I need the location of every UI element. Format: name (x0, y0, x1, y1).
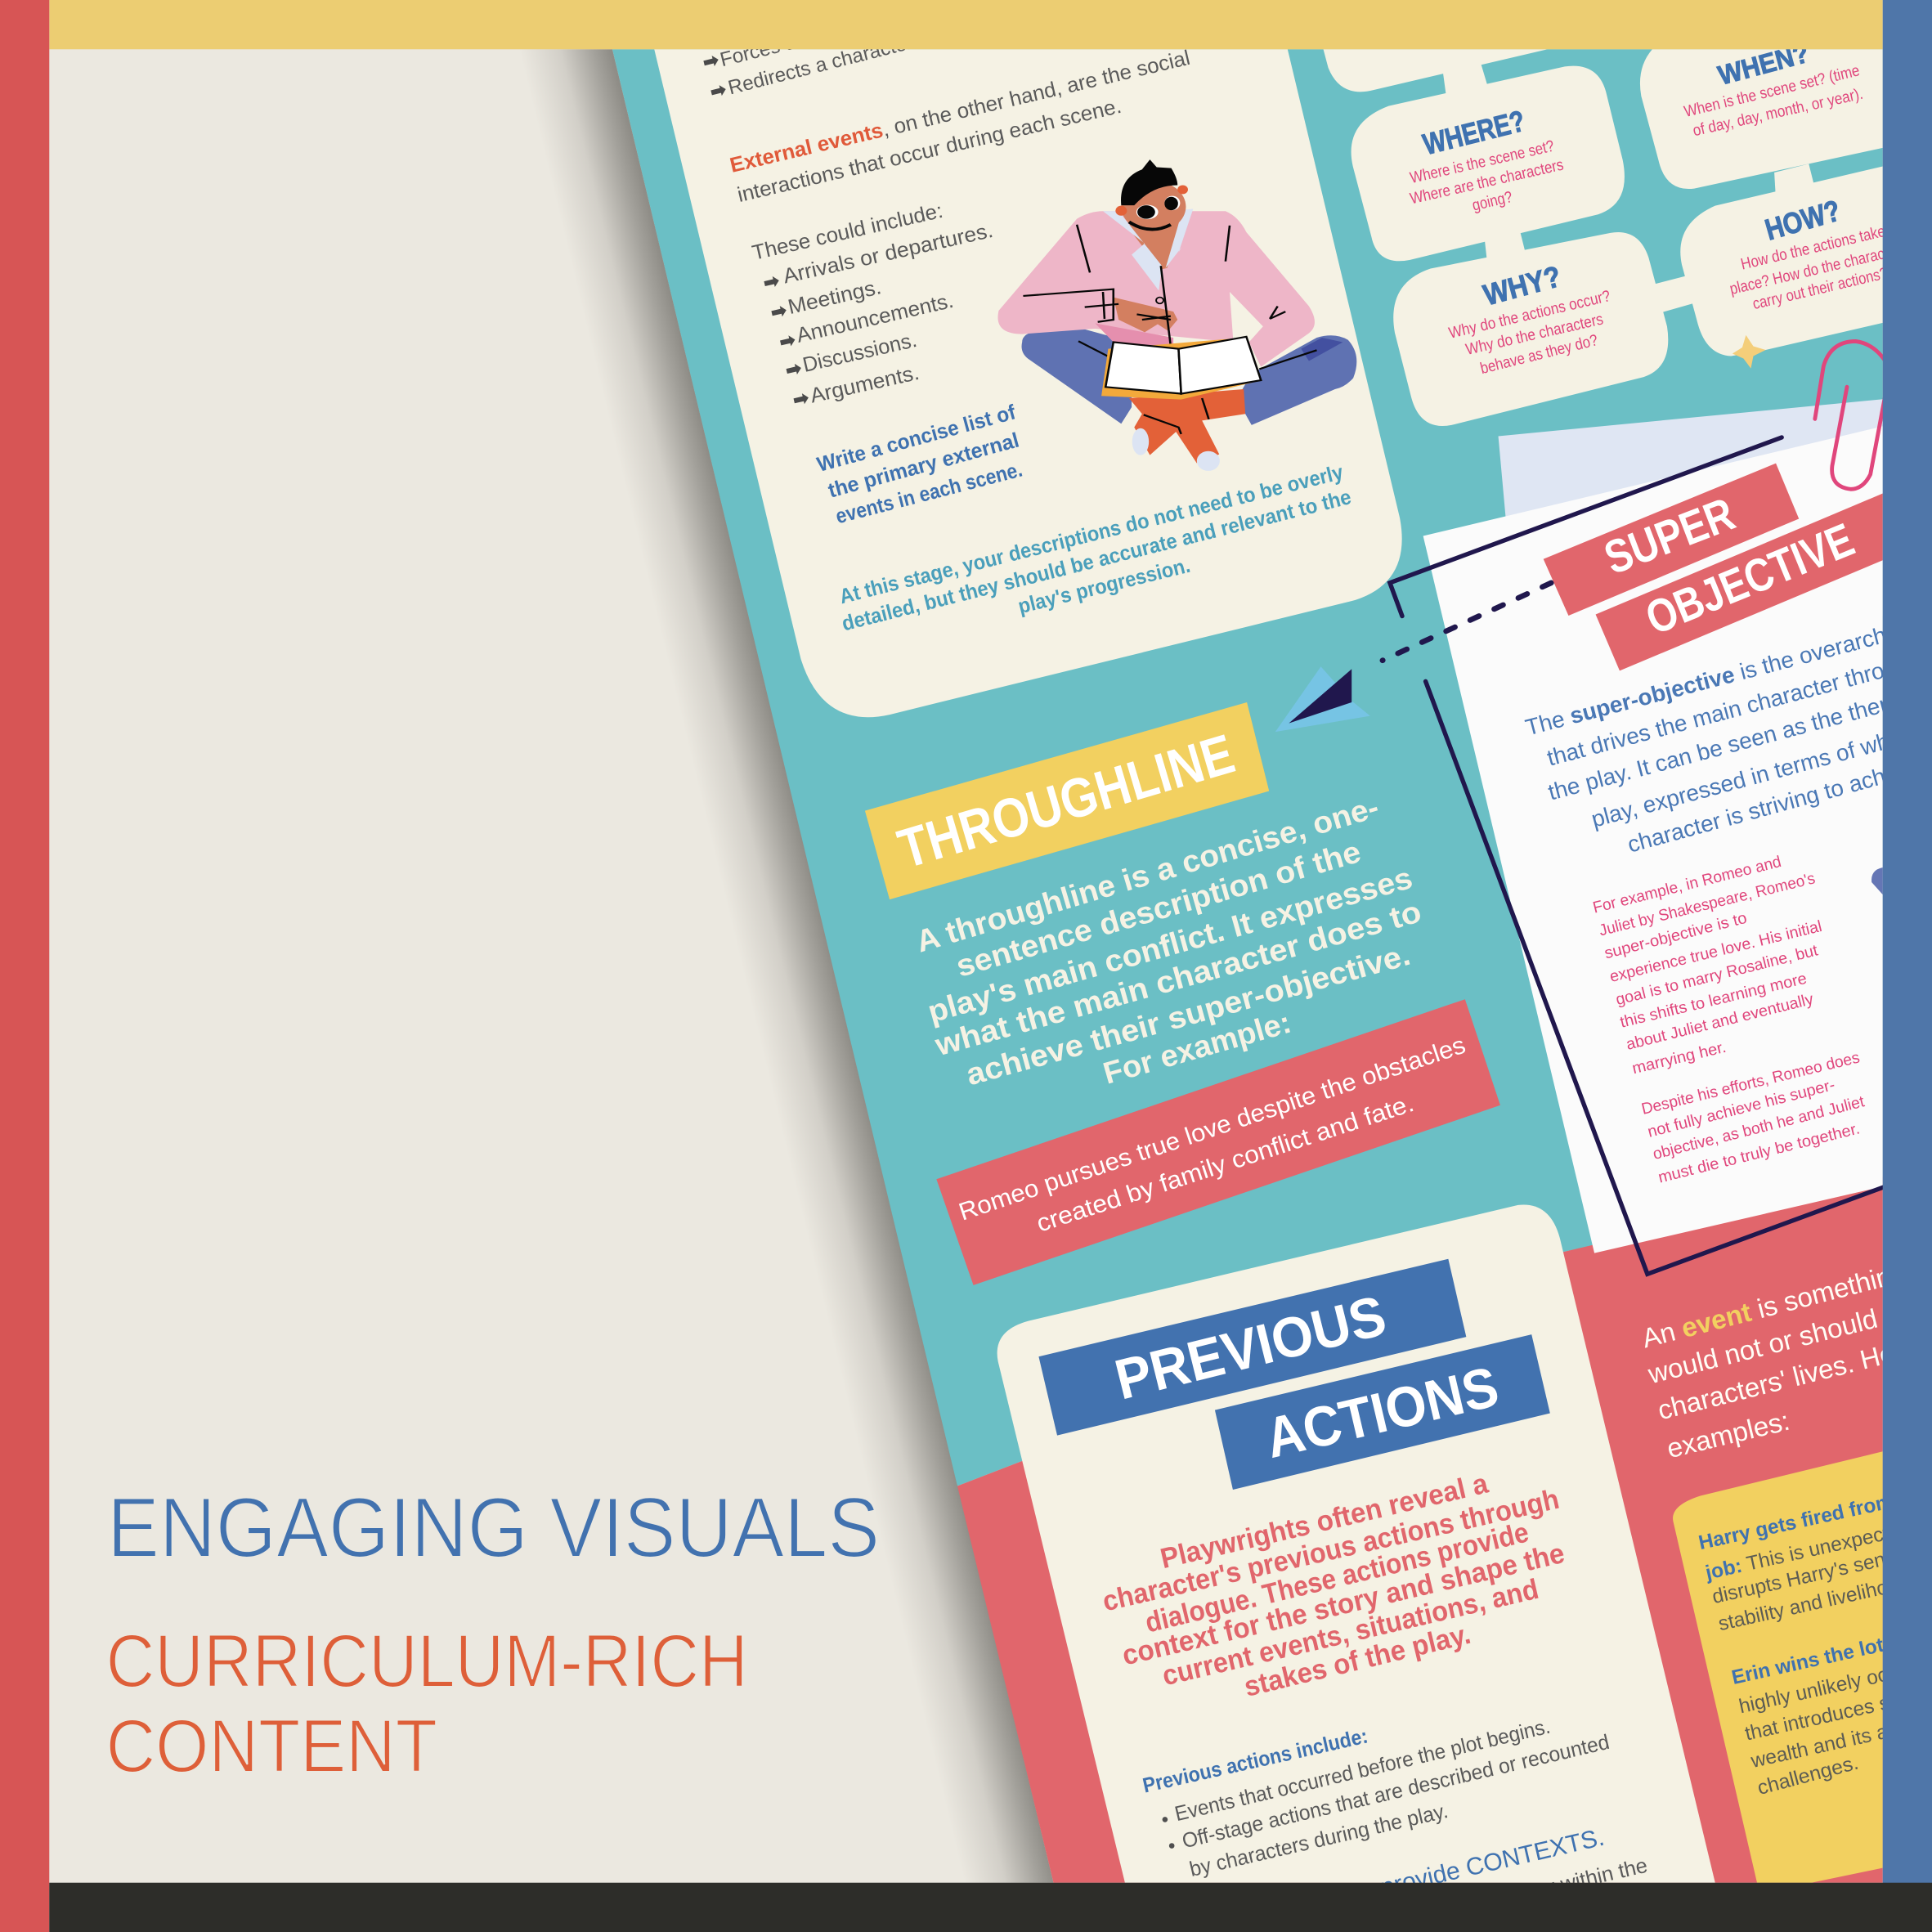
bubble: why: Why do the characters (1464, 310, 1605, 359)
bubble: why: behave as they do? (1478, 331, 1600, 378)
list: previous actions include (1141, 1715, 1611, 1881)
text: at this stage: detailed, but they should be accurate and relevant to the (840, 486, 1354, 635)
text: throughline definition: A throughline is a concise, one- (912, 789, 1383, 959)
front paper sheet (1423, 426, 1883, 1253)
heading: super (1544, 464, 1799, 616)
text: write a concise list: events in each scene. (833, 458, 1024, 528)
text: throughline definition: achieve their super-objective. (962, 937, 1414, 1092)
bubble: why: Why do the actions occur? (1447, 287, 1612, 343)
text: romeo example: objective, as both he and Juliet (1651, 1092, 1867, 1163)
heading: super: SUPER (1598, 488, 1741, 585)
bubble: when: of day, day, month, or year). (1691, 85, 1865, 140)
list: external events examples: Announcements. (795, 289, 956, 347)
text: romeo example: not fully achieve his super- (1646, 1076, 1837, 1141)
back paper sheet (1499, 399, 1883, 616)
text: super objective definition (1522, 602, 1932, 858)
text: romeo example: marrying her. (1630, 1038, 1728, 1078)
text: previous actions intro: dialogue. These actions provide (1142, 1517, 1531, 1639)
bubble: top partial (1324, 49, 1548, 92)
bubble: why: WHY? (1480, 259, 1564, 312)
subtitle: curriculum-rich content: CURRICULUM-RICH (106, 1620, 748, 1703)
text: event intro: examples: (1664, 1406, 1793, 1464)
text: romeo example: super-objective is to (1603, 909, 1749, 962)
text: throughline definition: For example: (1100, 1005, 1295, 1091)
frame: bottom dark bar (49, 1883, 1932, 1932)
bubble: how: carry out their actions? (1751, 264, 1889, 313)
icon: paperclip (1815, 341, 1888, 489)
subtitle: curriculum-rich content: CONTENT (106, 1705, 437, 1788)
text: write a concise list: Write a concise list of (814, 401, 1019, 477)
page drop shadow (493, 49, 1053, 1883)
list: previous actions include: by characters during the play. (1187, 1800, 1450, 1881)
text: throughline definition: what the main character does to (930, 894, 1425, 1063)
list: external events examples: Arrivals or departures. (781, 219, 995, 288)
text: throughline definition: play's main conflict. It expresses (924, 860, 1416, 1029)
text: romeo example: experience true love. His initial (1608, 917, 1824, 986)
callout: event examples: disrupts Harry's sense of (1710, 1539, 1930, 1608)
dashed flight line (1383, 583, 1551, 661)
frame: top yellow bar (49, 0, 1883, 49)
bubble: where (1352, 66, 1625, 261)
text: previous actions intro: stakes of the play. (1241, 1619, 1473, 1703)
callout: event examples (1673, 1451, 1932, 1883)
list: external events examples: ➡ (761, 270, 782, 294)
list: forces and redirects: ➡ (701, 49, 721, 74)
heading: actions: ACTIONS (1259, 1354, 1504, 1470)
text: previous actions intro: context for the story and shape the (1119, 1538, 1567, 1672)
text: write a concise list: the primary external (826, 429, 1021, 503)
text: romeo example: Despite his efforts, Romeo does (1639, 1048, 1862, 1118)
heading: actions (1215, 1334, 1550, 1490)
text: at this stage: At this stage, your descriptions do not need to be overly (837, 461, 1346, 608)
text: previous actions intro: current events, situations, and (1159, 1574, 1542, 1692)
bubble: where: Where are the characters (1409, 155, 1566, 208)
tilted poster page (612, 0, 1932, 1932)
panel: super objective paper (1383, 341, 1932, 1274)
text: romeo example: goal is to marry Rosaline, but (1614, 941, 1820, 1009)
heading: previous: PREVIOUS (1109, 1283, 1392, 1412)
list: previous actions include: Off-stage actions that are described or recounted (1180, 1731, 1611, 1853)
frame: right blue bar (1883, 0, 1932, 1932)
text: previous actions intro: Playwrights often reveal a (1158, 1468, 1491, 1575)
bubble: how: HOW? (1761, 193, 1844, 247)
bubble: when: When is the scene set? (time (1683, 61, 1862, 121)
frame: top-left bracket (1390, 437, 1782, 616)
connector: where to why (1485, 233, 1526, 262)
list: previous actions include: Events that occurred before the plot begins. (1172, 1715, 1553, 1826)
text: romeo example: Juliet by Shakespeare, Romeo's (1598, 869, 1817, 939)
icon: yellow sparkle (1733, 335, 1766, 369)
heading: throughline: THROUGHLINE (892, 724, 1241, 881)
list: previous actions include: Previous actions include: (1141, 1724, 1370, 1798)
list: external events examples: ➡ (769, 300, 789, 324)
callout: romeo throughline (936, 999, 1500, 1285)
text: external events: interactions that occur during each scene. (735, 95, 1123, 207)
callout: romeo throughline: Romeo pursues true love despite the obstacles (956, 1032, 1469, 1226)
coral page area (957, 1177, 1883, 1883)
bubble: why (1393, 232, 1668, 426)
bubble: where: going? (1471, 188, 1514, 215)
panel: previous actions (997, 1204, 1715, 1932)
text: provide contexts: They occur within the (1452, 1854, 1650, 1921)
teal page area (612, 49, 1883, 1486)
list: external events examples: ➡ (791, 388, 811, 411)
title: engaging visuals: ENGAGING VISUALS (107, 1480, 880, 1575)
list: external events examples (750, 199, 995, 411)
text: throughline definition (912, 789, 1425, 1092)
text: write a concise list (814, 401, 1024, 528)
list: forces and redirects: ➡ (708, 79, 728, 103)
text: previous actions intro: character's previous actions through (1100, 1484, 1562, 1617)
list: external events examples: ➡ (778, 329, 797, 353)
list: external events examples: Meetings. (786, 276, 883, 319)
panel: question bubbles (1324, 38, 1908, 426)
list: external events examples: Arguments. (808, 361, 921, 408)
panel: throughline (865, 702, 1500, 1285)
list: external events examples: ➡ (783, 357, 804, 382)
callout: romeo throughline: created by family conflict and fate. (1033, 1090, 1417, 1238)
panel: event definition (1639, 1211, 1932, 1883)
bubble: how: place? How do the characters (1728, 240, 1908, 298)
callout: event examples: Harry gets fired from his (1697, 1483, 1930, 1554)
icon: partial figure at edge (1871, 867, 1883, 894)
list: forces and redirects (701, 0, 1059, 103)
text: romeo example: about Juliet and eventually (1625, 990, 1815, 1054)
text: throughline definition: sentence description of the (953, 834, 1365, 984)
heading: previous (1038, 1259, 1466, 1436)
frame: left red bar (0, 0, 49, 1932)
callout: event examples: stability and livelihood. (1716, 1571, 1917, 1635)
text: external events: External events, on the other hand, are the social (728, 47, 1192, 177)
text: romeo example: must die to truly be together. (1656, 1119, 1862, 1187)
bubble: where: Where is the scene set? (1409, 137, 1556, 187)
heading: objective (1596, 494, 1883, 670)
text: super objective definition: character is striving to achieve. (1625, 751, 1932, 858)
callout: event examples: challenges. (1755, 1752, 1861, 1800)
connector: why to how (1652, 276, 1694, 313)
list: external events examples: Discussions. (800, 329, 919, 377)
bubble: when: WHEN? (1715, 38, 1813, 92)
list: external events examples: These could include: (750, 199, 945, 265)
list: forces and redirects: Redirects a character's goals. (726, 14, 985, 99)
bubble: how: How do the actions take (1739, 222, 1887, 274)
heading: objective: OBJECTIVE (1638, 513, 1862, 645)
bubble: how (1680, 166, 1908, 356)
subtitle: curriculum-rich content (106, 1620, 748, 1788)
text: romeo example: For example, in Romeo and (1591, 853, 1783, 917)
text: romeo example (1591, 853, 1867, 1187)
text: event intro (1639, 1211, 1932, 1464)
connector: top to where (1443, 64, 1488, 99)
bubble: when (1640, 38, 1883, 189)
text: romeo example: this shifts to learning more (1618, 970, 1809, 1032)
text: at this stage: play's progression. (1016, 554, 1193, 618)
icon: paper plane (1275, 666, 1370, 732)
text: previous actions intro (1100, 1468, 1567, 1703)
frame: lower bracket (1426, 681, 1885, 1274)
bubble: where: WHERE? (1419, 104, 1528, 161)
connector: when to how (1774, 164, 1813, 194)
icon: person reading a book (997, 159, 1356, 471)
panel: external events (654, 0, 1402, 717)
